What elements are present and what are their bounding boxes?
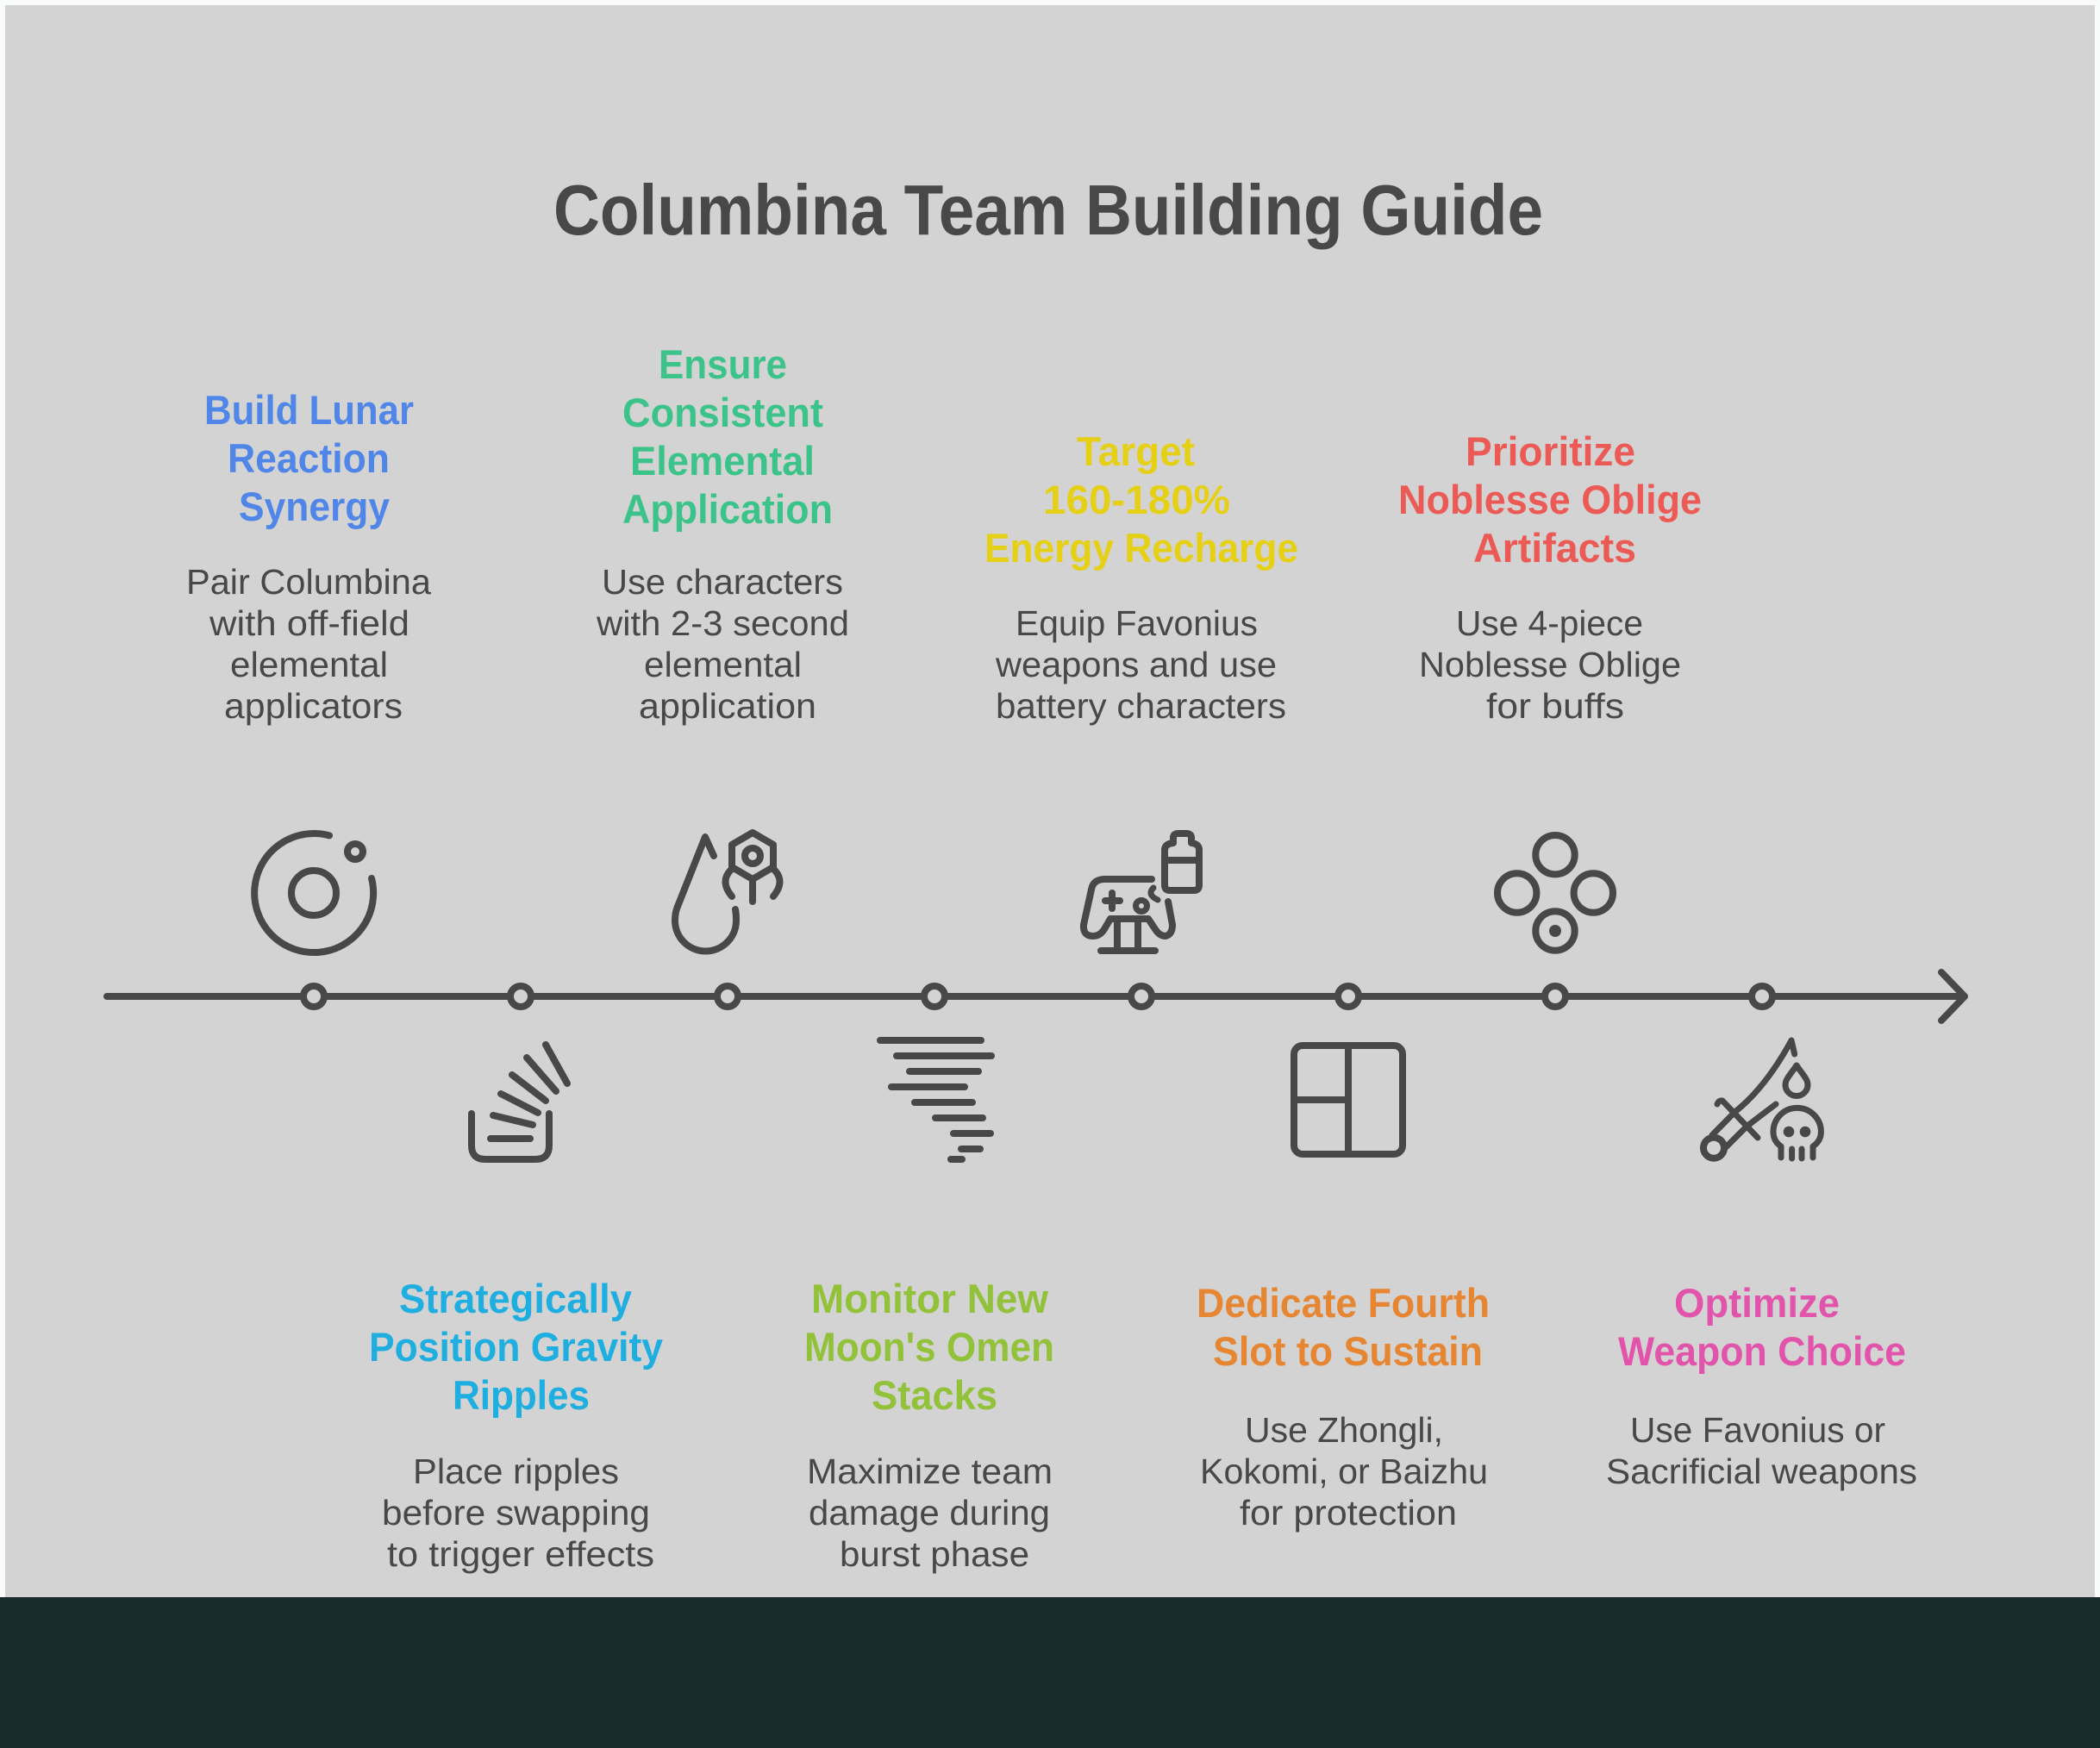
heading xyxy=(1618,1281,1906,1375)
heading: Energy Recharge xyxy=(984,526,1298,571)
description xyxy=(382,1451,654,1574)
heading xyxy=(369,1277,664,1419)
heading: Dedicate Fourth xyxy=(1197,1281,1490,1327)
heading: Application xyxy=(622,487,833,533)
panel: Monitor New Moon's Omen Stacks xyxy=(804,1040,1054,1574)
heading: Monitor New xyxy=(811,1277,1049,1322)
heading xyxy=(984,429,1298,571)
heading: Strategically xyxy=(399,1277,633,1322)
description: with 2-3 second xyxy=(596,603,849,643)
panel: Target 160-180% Energy Recharge xyxy=(984,429,1298,951)
description: before swapping xyxy=(382,1493,650,1533)
description: Use Zhongli, xyxy=(1245,1410,1443,1450)
description: elemental xyxy=(230,645,388,684)
description: Noblesse Oblige xyxy=(1419,645,1681,684)
icon: tornado xyxy=(880,1040,991,1159)
description xyxy=(596,562,849,726)
timeline arrowhead xyxy=(1941,972,1965,1021)
heading: Reaction xyxy=(228,436,390,482)
panel: Build Lunar Reaction Synergy xyxy=(186,388,431,952)
description xyxy=(1200,1410,1488,1533)
icon: drop with nut and claw xyxy=(675,833,779,952)
heading: Position Gravity xyxy=(369,1325,664,1370)
panel: Dedicate Fourth Slot to Sustain xyxy=(1197,1046,1490,1533)
timeline xyxy=(107,972,1965,1021)
icon: four circles xyxy=(1497,835,1613,951)
description: Equip Favonius xyxy=(1016,603,1258,643)
footer band xyxy=(0,1597,2100,1748)
heading: Noblesse Oblige xyxy=(1398,478,1702,523)
description: elemental xyxy=(644,645,802,684)
heading xyxy=(1197,1281,1490,1375)
heading xyxy=(622,342,833,533)
heading: Moon's Omen xyxy=(804,1325,1054,1370)
heading: Artifacts xyxy=(1473,526,1636,571)
description: application xyxy=(639,686,816,726)
description: Kokomi, or Baizhu xyxy=(1200,1451,1488,1491)
description: Place ripples xyxy=(413,1451,619,1491)
heading: Slot to Sustain xyxy=(1213,1329,1483,1375)
description xyxy=(1419,603,1681,726)
icon: sword, drop and skull xyxy=(1703,1040,1821,1158)
description xyxy=(807,1451,1053,1574)
icon: stacked ripples xyxy=(472,1045,567,1159)
icon: orbit circle xyxy=(254,833,373,952)
description: for protection xyxy=(1240,1493,1457,1533)
heading: Build Lunar xyxy=(204,388,414,434)
description: Use 4-piece xyxy=(1456,603,1643,643)
heading: Ripples xyxy=(453,1373,590,1419)
heading xyxy=(204,388,414,530)
icon: split panel xyxy=(1294,1046,1403,1154)
heading: Prioritize xyxy=(1466,429,1635,475)
heading: Stacks xyxy=(872,1373,997,1419)
heading xyxy=(1398,429,1702,571)
description xyxy=(186,562,431,726)
heading: Ensure xyxy=(659,342,787,388)
heading: Synergy xyxy=(239,484,391,530)
timeline line xyxy=(107,993,1964,1000)
timeline nodes xyxy=(303,986,1772,1007)
description: with off-field xyxy=(209,603,409,643)
description xyxy=(1606,1410,1917,1491)
heading: Target xyxy=(1077,429,1195,475)
panel: Optimize Weapon Choice xyxy=(1606,1040,1917,1491)
heading: 160-180% xyxy=(1043,478,1230,523)
heading xyxy=(804,1277,1054,1419)
heading: Elemental xyxy=(630,439,815,484)
panel: Ensure Consistent Elemental Application xyxy=(596,342,849,952)
description: applicators xyxy=(224,686,403,726)
description: damage during xyxy=(809,1493,1050,1533)
description: for buffs xyxy=(1486,686,1624,726)
panel: Strategically Position Gravity Ripples xyxy=(369,1045,664,1574)
description: Pair Columbina xyxy=(186,562,431,602)
panel: Prioritize Noblesse Oblige Artifacts xyxy=(1398,429,1702,951)
description: battery characters xyxy=(996,686,1286,726)
description xyxy=(995,603,1286,726)
description: Use characters xyxy=(602,562,843,602)
description: Sacrificial weapons xyxy=(1606,1451,1917,1491)
description: weapons and use xyxy=(995,645,1277,684)
description: to trigger effects xyxy=(387,1534,654,1574)
description: burst phase xyxy=(840,1534,1029,1574)
heading: Consistent xyxy=(622,390,823,436)
heading: Optimize xyxy=(1674,1281,1840,1327)
title: Columbina Team Building Guide xyxy=(553,170,1543,250)
heading: Weapon Choice xyxy=(1618,1329,1906,1375)
description: Use Favonius or xyxy=(1630,1410,1885,1450)
icon: game controller with battery xyxy=(1084,833,1199,951)
description: Maximize team xyxy=(807,1451,1053,1491)
